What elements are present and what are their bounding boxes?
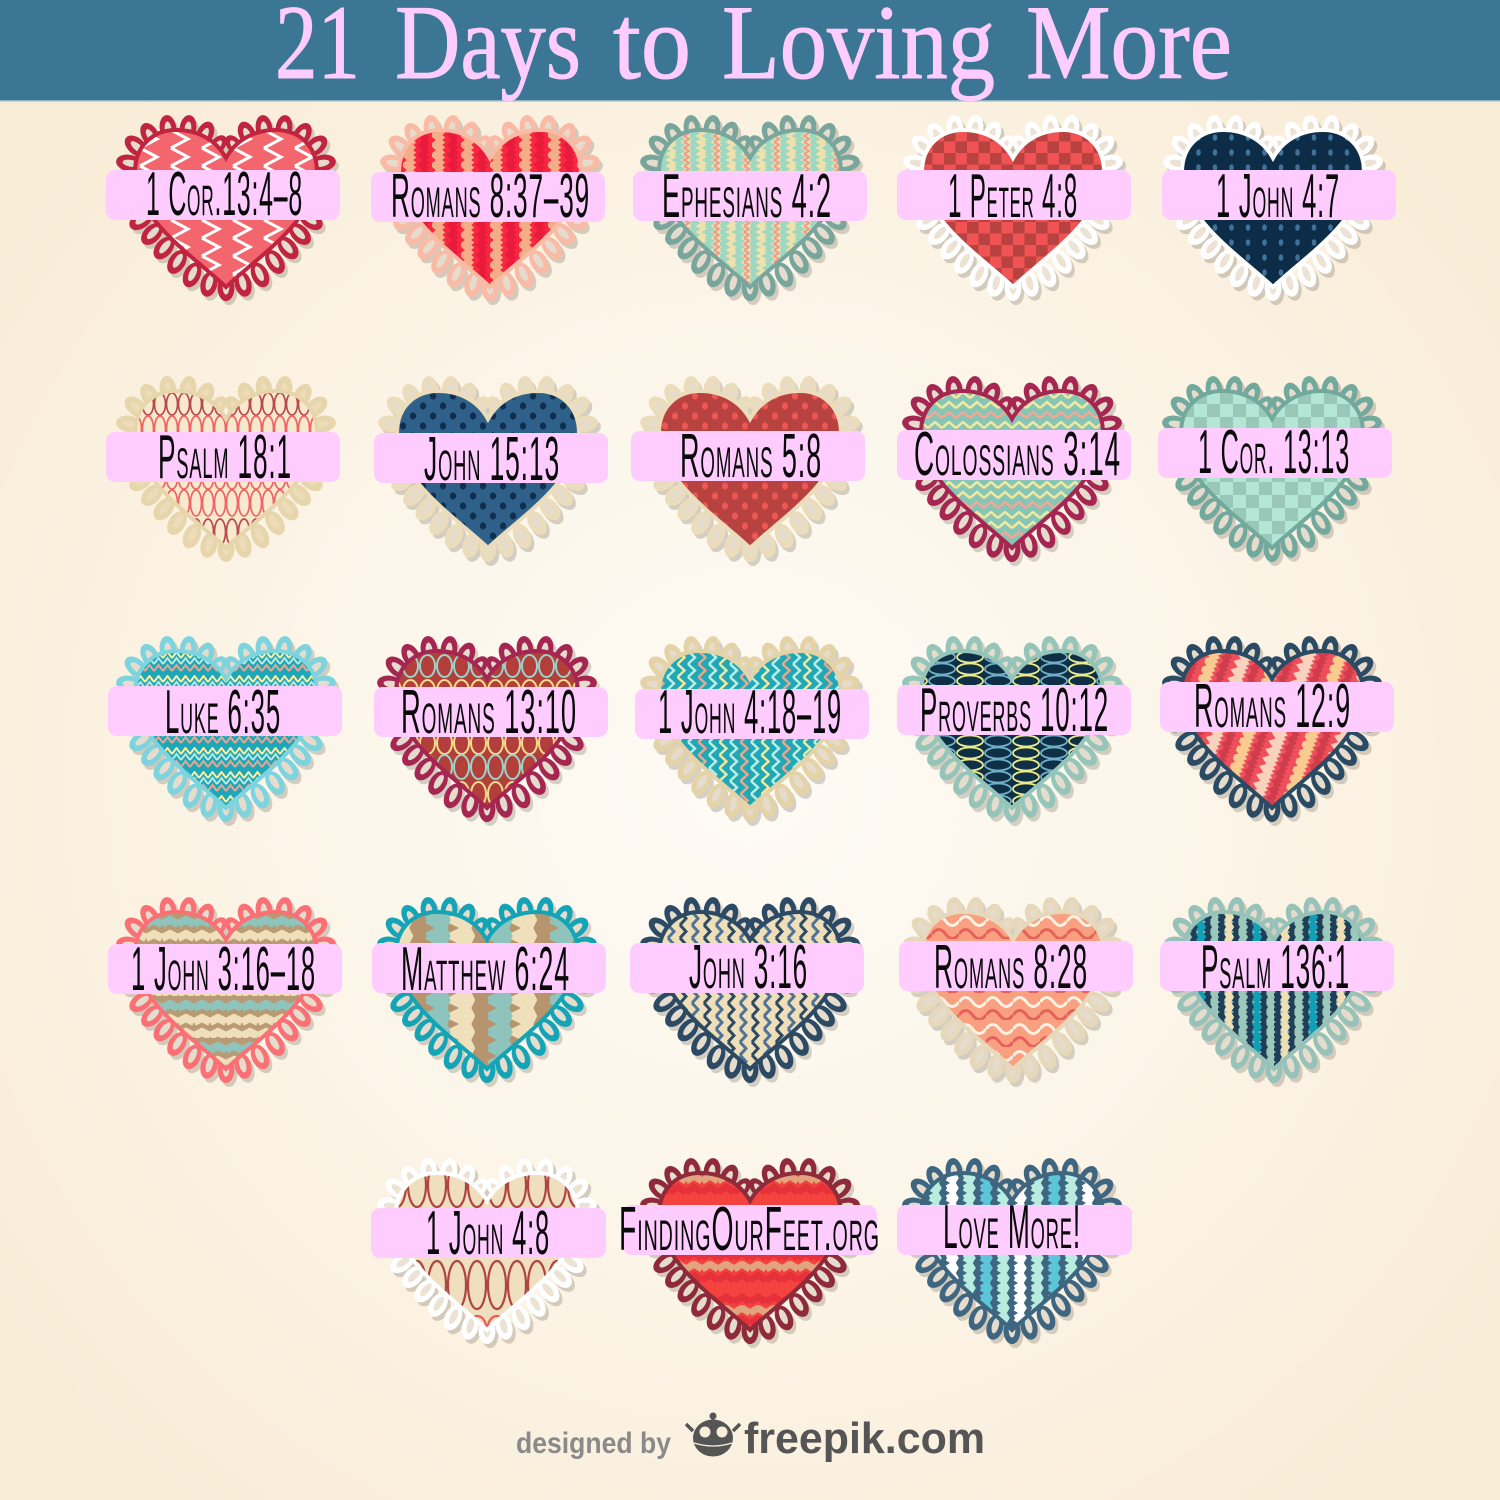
ribbon label (1158, 418, 1392, 487)
ribbon label (106, 160, 340, 229)
ribbon label: John 15:13 (424, 425, 560, 494)
text: FindingOurFeet.org (619, 1195, 880, 1264)
ribbon label: 1 John 4:8 (426, 1199, 550, 1268)
ribbon label: Luke 6:35 (165, 678, 281, 747)
heart (377, 375, 602, 566)
heart tag: John 15:13 (374, 375, 608, 566)
heart tag: 1 Cor. 13:13 (1158, 375, 1392, 566)
ribbon label: Love More! (943, 1193, 1081, 1262)
ribbon label (374, 425, 608, 494)
heart (1161, 635, 1386, 826)
heart (1161, 375, 1386, 566)
ribbon label (371, 162, 605, 231)
heart tag: Romans 8:28 (899, 896, 1133, 1087)
heart (1163, 896, 1388, 1087)
heart (115, 375, 337, 562)
ribbon label (1160, 672, 1394, 741)
text: 1 Cor.13:4–8 (146, 160, 303, 229)
ribbon label: Matthew 6:24 (401, 935, 570, 1004)
heart tag: 1 John 4:8 (371, 1157, 606, 1348)
title (275, 0, 1232, 101)
text: 1 John 3:16–18 (131, 935, 316, 1004)
ribbon label (897, 162, 1131, 231)
heart (902, 896, 1127, 1087)
heart (115, 114, 340, 305)
heart (379, 114, 604, 305)
heart tag: Love More! (897, 1157, 1132, 1348)
heart (639, 375, 864, 566)
heart (901, 1157, 1126, 1348)
ribbon label (897, 676, 1131, 745)
text: Proverbs 10:12 (920, 676, 1109, 745)
heart tag: Romans 12:9 (1160, 635, 1394, 826)
text: 1 John 4:18–19 (658, 678, 842, 747)
ribbon label (1162, 162, 1396, 231)
heart (902, 114, 1127, 305)
heart tag: 1 John 3:16-18 (108, 896, 342, 1087)
heart tag: 1 Cor. 13:4-8 (106, 114, 340, 305)
ribbon label (108, 678, 342, 747)
heart tag: 1 Peter 4:8 (897, 114, 1131, 305)
text: Romans 8:37–39 (391, 162, 590, 231)
ribbon label (108, 935, 342, 1004)
heart (901, 635, 1126, 826)
heart tag: John 3:16 (630, 896, 864, 1087)
heart (1162, 114, 1387, 305)
heart tag: Romans 8:37-39 (371, 114, 605, 305)
ribbon label (1160, 933, 1394, 1002)
heart tag: Romans 5:8 (631, 375, 865, 566)
credit: designed by: designed by (516, 1427, 671, 1460)
heart tag: 1 John 4:18-19 (635, 635, 869, 826)
ribbon label (374, 678, 608, 747)
text: Colossians 3:14 (914, 420, 1121, 489)
heart tag: Luke 6:35 (108, 635, 342, 826)
ribbon label (635, 678, 869, 747)
heart (115, 896, 340, 1087)
ribbon label: Ephesians 4:2 (662, 162, 832, 231)
heart (376, 635, 601, 826)
heart (376, 896, 601, 1087)
credit line (516, 1412, 985, 1463)
ribbon label: Romans 5:8 (680, 422, 822, 491)
ribbon label: Romans 8:28 (934, 933, 1088, 1002)
heart (115, 635, 340, 826)
ribbon label: John 3:16 (689, 933, 808, 1002)
heart tag: Proverbs 10:12 (897, 635, 1131, 826)
ribbon label (372, 935, 606, 1004)
ribbon label (630, 933, 864, 1002)
heart tag: 1 John 4:7 (1162, 114, 1396, 305)
ribbon label: Romans 13:10 (401, 678, 577, 747)
heart (639, 1157, 864, 1348)
heart (639, 114, 864, 305)
heart tag: Ephesians 4:2 (633, 114, 867, 305)
ribbon label (106, 423, 340, 492)
heart (376, 1157, 601, 1348)
heart tag: Romans 13:10 (374, 635, 608, 826)
ribbon label (899, 933, 1133, 1002)
credit: freepik.com: freepik.com (744, 1414, 985, 1463)
ribbon label (631, 422, 865, 491)
heart tag: Colossians 3:14 (897, 375, 1131, 566)
ribbon label (633, 162, 867, 231)
heart tag: Psalm 18:1 (106, 375, 340, 562)
heart tag: FindingOurFeet.org (619, 1157, 880, 1348)
ribbon label (371, 1199, 606, 1268)
icon: freepik robot (686, 1412, 740, 1456)
heart tag: Matthew 6:24 (372, 896, 606, 1087)
ribbon label: Psalm 18:1 (158, 423, 292, 492)
heart (639, 635, 864, 826)
heart (639, 896, 864, 1087)
ribbon label: 1 Peter 4:8 (948, 162, 1078, 231)
heart tag: Psalm 136:1 (1160, 896, 1394, 1087)
ribbon label (897, 1193, 1132, 1262)
ribbon label (897, 420, 1131, 489)
ribbon label (619, 1195, 880, 1264)
title banner (0, 0, 1500, 102)
heart (901, 375, 1126, 566)
